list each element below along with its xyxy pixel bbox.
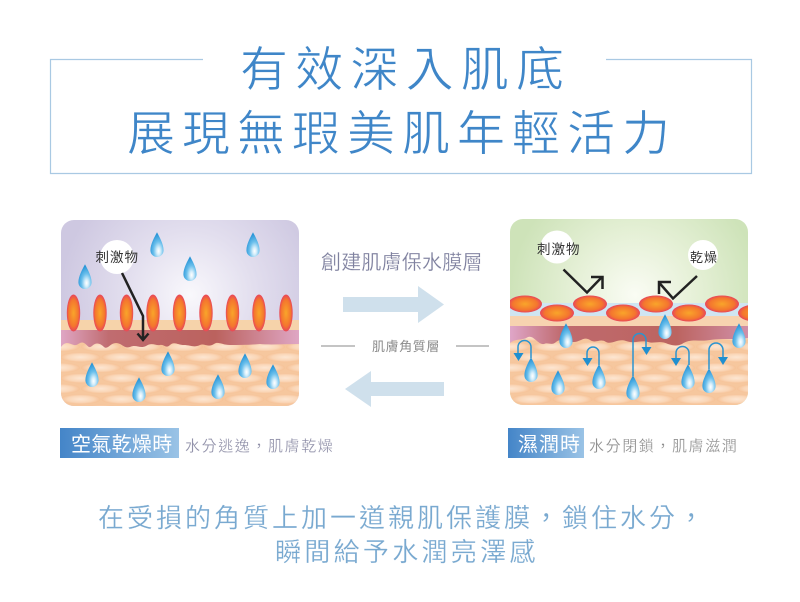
divider right	[456, 346, 489, 347]
irritant bubble: 刺激物	[96, 250, 139, 265]
arrow: dryness deflected	[659, 276, 697, 298]
arrow: irritant deflected	[564, 270, 602, 292]
water drops	[78, 232, 280, 402]
water drops	[524, 314, 746, 400]
arrow right	[343, 286, 444, 323]
tan layer	[510, 316, 748, 327]
irritant bubble: 刺激物	[537, 242, 580, 257]
dryness bubble	[688, 240, 718, 270]
dry air background	[61, 220, 299, 406]
dryness bubble: 乾燥	[690, 250, 718, 265]
panel: dry skin	[61, 220, 299, 406]
title line 1: 有效深入肌底	[240, 44, 571, 97]
tan layer	[61, 320, 299, 330]
caption: moist state: 水分閉鎖，肌膚滋潤	[589, 438, 738, 455]
conclusion	[98, 503, 707, 567]
label: moist state: 濕潤時	[518, 433, 581, 456]
moist background	[510, 219, 748, 405]
irritant bubble	[537, 230, 580, 264]
arrow left	[345, 371, 444, 407]
irritant bubble	[96, 240, 139, 274]
skin cells	[61, 343, 299, 406]
title frame	[50, 60, 752, 174]
heading: moisture film: 創建肌膚保水膜層	[321, 251, 483, 274]
title line 2: 展現無瑕美肌年輕活力	[127, 108, 677, 161]
label: dry state	[60, 428, 179, 458]
arrow: irritant penetrating	[122, 273, 148, 340]
curved moisture arrows	[514, 334, 728, 376]
caption: dry state: 水分逃逸，肌膚乾燥	[185, 437, 334, 455]
red cells row	[508, 296, 772, 322]
conclusion line 1: 在受損的角質上加一道親肌保護膜，鎖住水分，	[98, 503, 707, 533]
label: dry state: 空氣乾燥時	[71, 433, 172, 456]
panel: moist skin	[508, 219, 772, 405]
title	[127, 44, 677, 161]
stratum band	[510, 326, 748, 346]
red cells row	[67, 294, 293, 332]
light blue moisture film	[510, 303, 748, 316]
conclusion line 2: 瞬間給予水潤亮澤感	[275, 537, 539, 567]
divider left	[321, 346, 355, 347]
skin cells	[510, 337, 748, 405]
label: moist state	[508, 428, 584, 458]
damaged stratum band	[61, 330, 299, 350]
label: stratum corneum: 肌膚角質層	[372, 339, 440, 354]
